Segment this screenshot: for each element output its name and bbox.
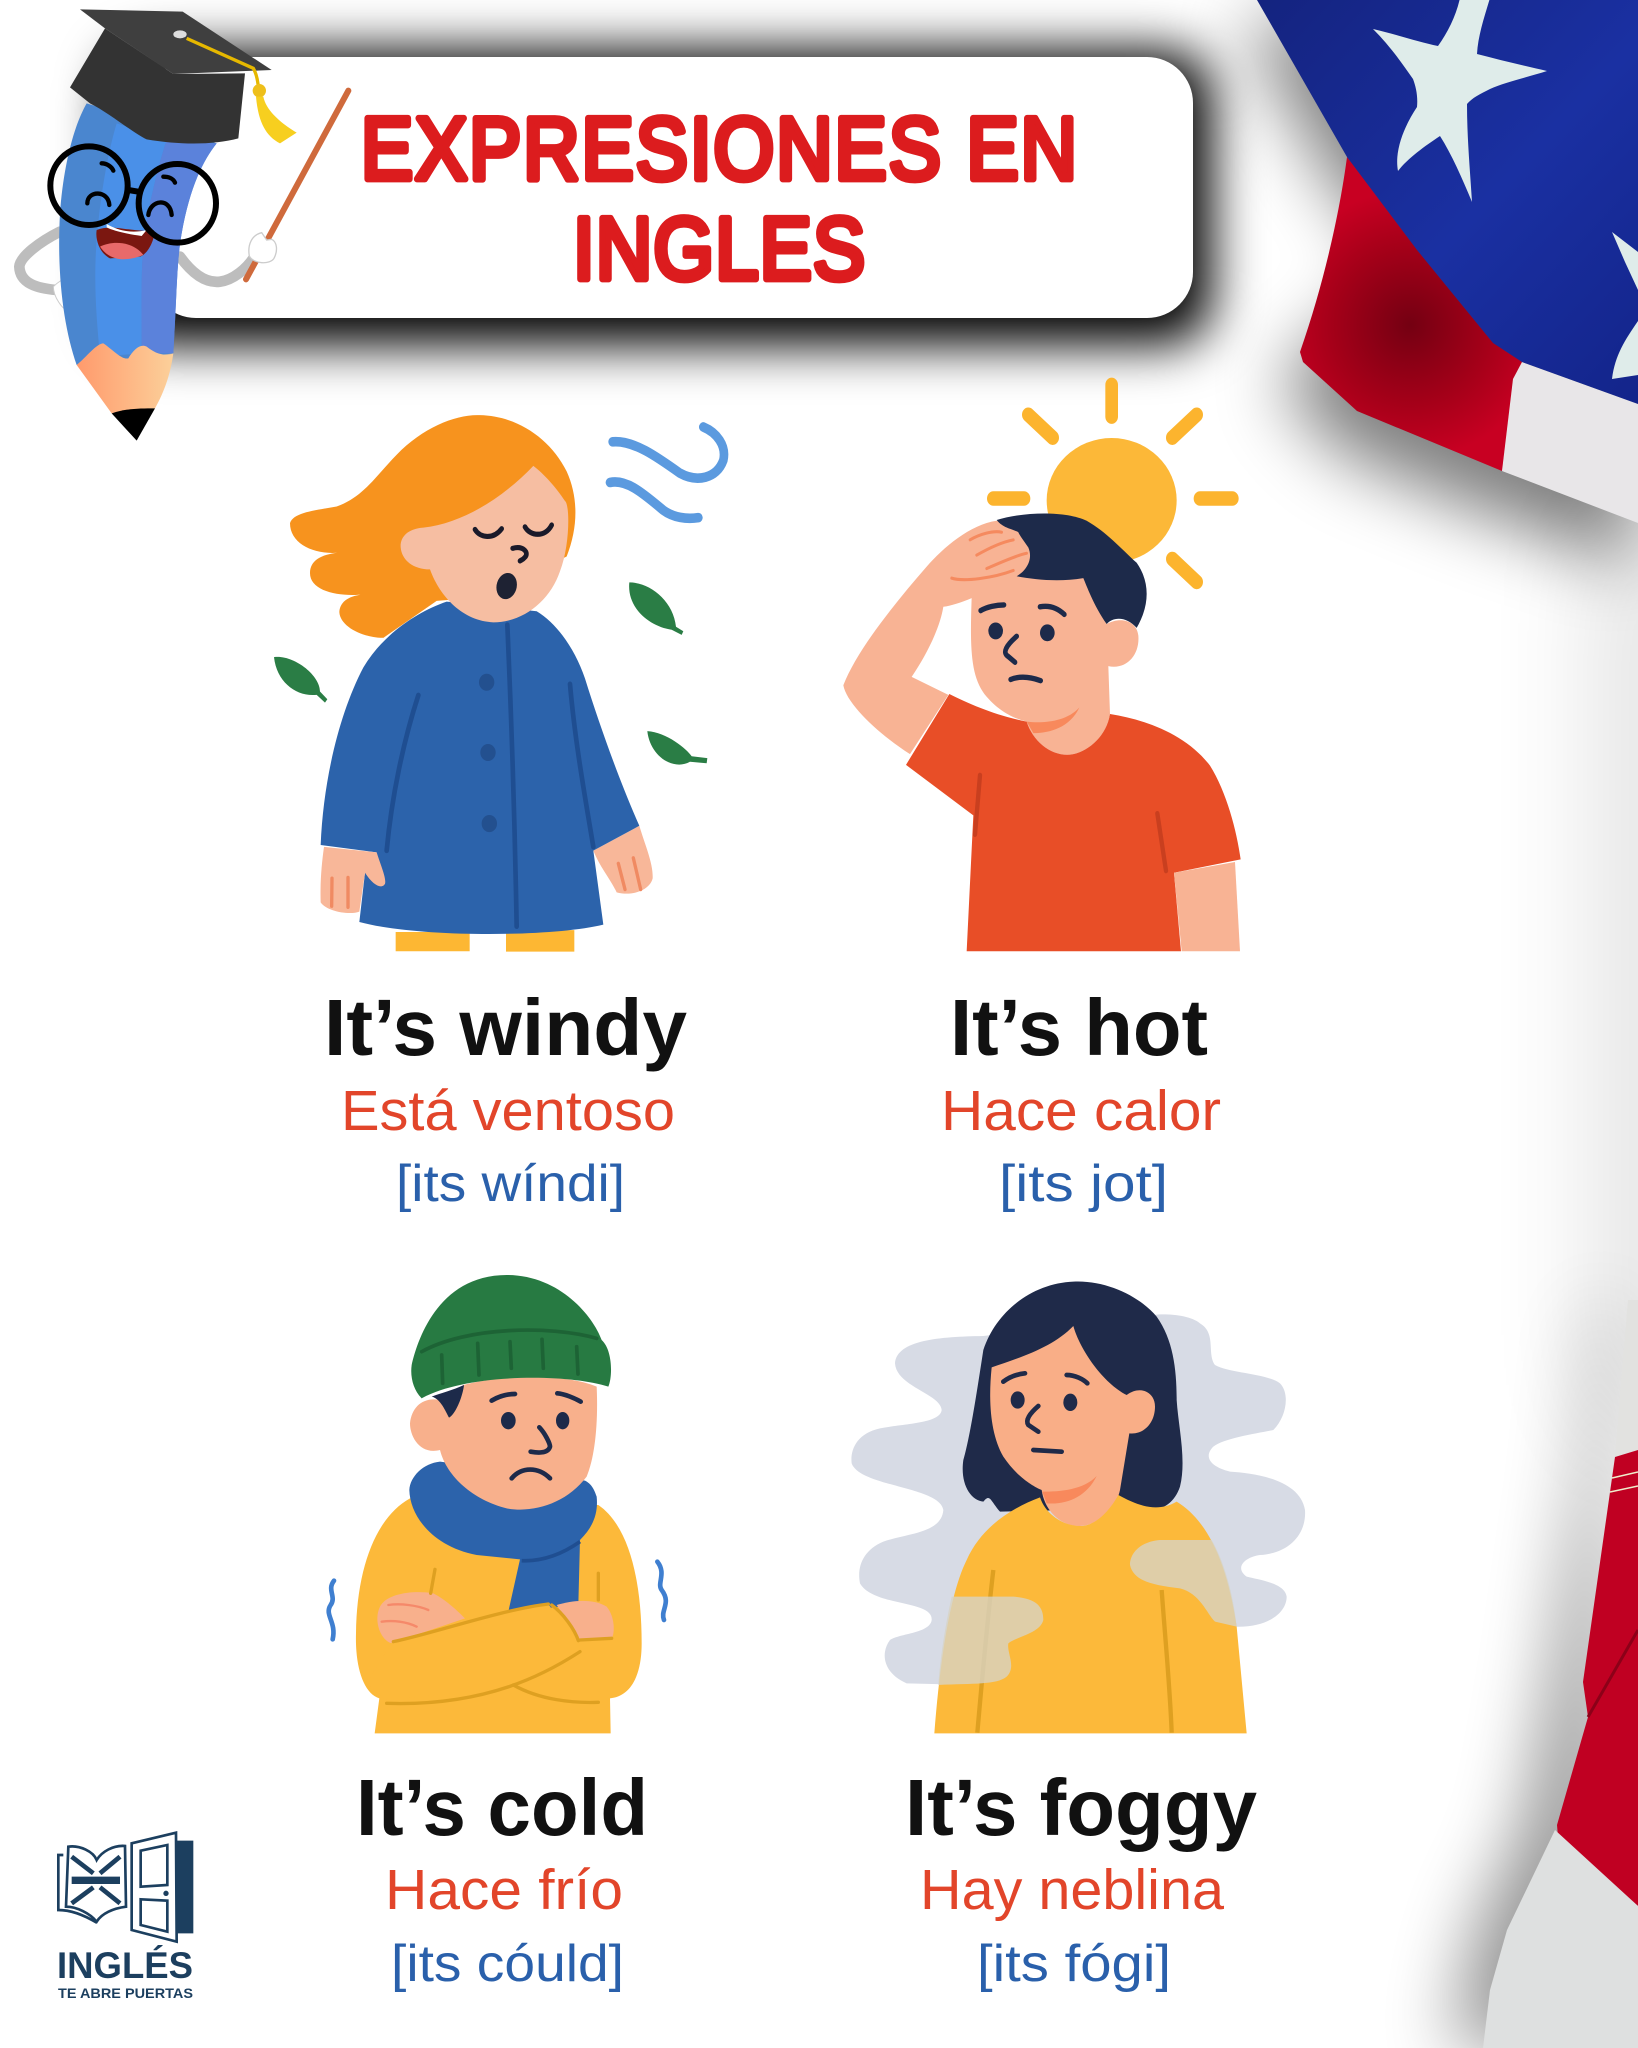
face	[401, 466, 568, 622]
flag: bottom right corner	[1483, 1300, 1638, 2048]
mascot pointer stick	[246, 91, 348, 279]
coat	[321, 602, 639, 934]
pronunciation: [its wíndi]	[396, 1155, 625, 1213]
beanie ribs	[422, 1330, 597, 1383]
face	[990, 1326, 1155, 1526]
logo	[57, 1833, 193, 2001]
hair	[432, 1385, 464, 1418]
face features	[1003, 1373, 1087, 1452]
title line 2: INGLES	[573, 200, 865, 298]
label: windy	[324, 983, 688, 1213]
right hand	[593, 826, 653, 894]
hand lines	[382, 1604, 428, 1627]
flag white stripe	[1502, 362, 1638, 523]
pronunciation: [its fógi]	[977, 1935, 1171, 1993]
english phrase: It’s windy	[324, 983, 688, 1072]
sweater seams	[977, 1570, 1172, 1733]
banner shadow	[110, 50, 1212, 345]
left hand	[321, 847, 385, 913]
pronunciation: [its cóuld]	[391, 1935, 624, 1993]
pencil mascot	[19, 9, 348, 441]
arm and hand	[843, 521, 1037, 754]
coat buttons	[479, 674, 497, 832]
mascot left hand	[53, 278, 69, 311]
flag blue canton	[1257, 0, 1638, 404]
flag white strip upper	[1615, 1300, 1638, 1460]
label: hot	[941, 983, 1221, 1213]
wind lines	[610, 427, 724, 518]
english phrase: It’s foggy	[905, 1763, 1258, 1852]
flag white fabric	[1483, 1830, 1638, 2048]
leaves	[274, 582, 707, 765]
spanish translation: Está ventoso	[341, 1079, 675, 1143]
title banner	[150, 57, 1193, 318]
pencil body	[59, 103, 217, 365]
illustration: foggy woman	[851, 1282, 1305, 1733]
sweater	[356, 1498, 642, 1733]
sweater folds	[387, 1569, 612, 1704]
flag star	[1373, 0, 1547, 202]
lower arm	[1174, 862, 1240, 951]
face features	[981, 605, 1064, 681]
beanie	[411, 1275, 611, 1398]
mascot eyes	[87, 163, 175, 215]
logo tagline: TE ABRE PUERTAS	[58, 1985, 193, 2001]
illustration: hot man with sun	[843, 385, 1241, 951]
fog over sweater	[938, 1540, 1237, 1685]
mascot right hand	[249, 233, 276, 263]
hair	[997, 513, 1147, 628]
sweater	[934, 1495, 1247, 1733]
label: cold	[356, 1763, 648, 1993]
flag red fold	[1557, 1450, 1638, 1906]
sun	[993, 385, 1232, 582]
hair	[290, 415, 575, 638]
pencil lead	[112, 408, 155, 441]
flag: top right corner	[1257, 0, 1638, 523]
pronunciation: [its jot]	[999, 1155, 1168, 1213]
mascot glasses	[50, 146, 216, 243]
neck crease	[1042, 1476, 1097, 1504]
illustration: windy woman	[274, 415, 724, 952]
cap tassel	[187, 38, 259, 90]
flag red stripe	[1300, 157, 1522, 471]
legs	[396, 930, 574, 952]
head	[410, 1377, 597, 1510]
spanish translation: Hace calor	[941, 1079, 1221, 1143]
english phrase: It’s cold	[356, 1763, 648, 1852]
head	[971, 574, 1138, 755]
mascot mouth	[96, 224, 154, 259]
mascot arms	[19, 232, 253, 290]
pencil wood tip	[77, 343, 173, 413]
face features	[475, 525, 552, 602]
spanish translation: Hay neblina	[920, 1858, 1224, 1922]
hands	[377, 1592, 614, 1643]
spanish translation: Hace frío	[385, 1858, 623, 1922]
crossed arm	[367, 1604, 581, 1700]
label: foggy	[905, 1763, 1258, 1993]
title line 1: EXPRESIONES EN	[361, 100, 1077, 198]
hand lines	[952, 532, 1027, 580]
logo icon: book and door	[58, 1833, 193, 1942]
t-shirt	[906, 694, 1241, 951]
hair	[963, 1282, 1183, 1512]
coat seams	[387, 625, 593, 926]
shiver marks	[329, 1562, 666, 1639]
flag star partial	[1612, 232, 1638, 379]
fog cloud	[851, 1314, 1305, 1685]
logo wordmark: INGLÉS	[57, 1945, 193, 1986]
soft shadows from flag	[1241, 22, 1638, 2048]
illustration: cold man	[329, 1275, 666, 1733]
title text	[361, 100, 1077, 298]
graduation cap	[70, 9, 297, 143]
finger lines	[332, 858, 641, 907]
shirt seams	[975, 775, 1166, 871]
face features	[492, 1393, 581, 1478]
neck crease	[1027, 707, 1079, 733]
scarf	[409, 1462, 597, 1612]
english phrase: It’s hot	[950, 983, 1208, 1072]
